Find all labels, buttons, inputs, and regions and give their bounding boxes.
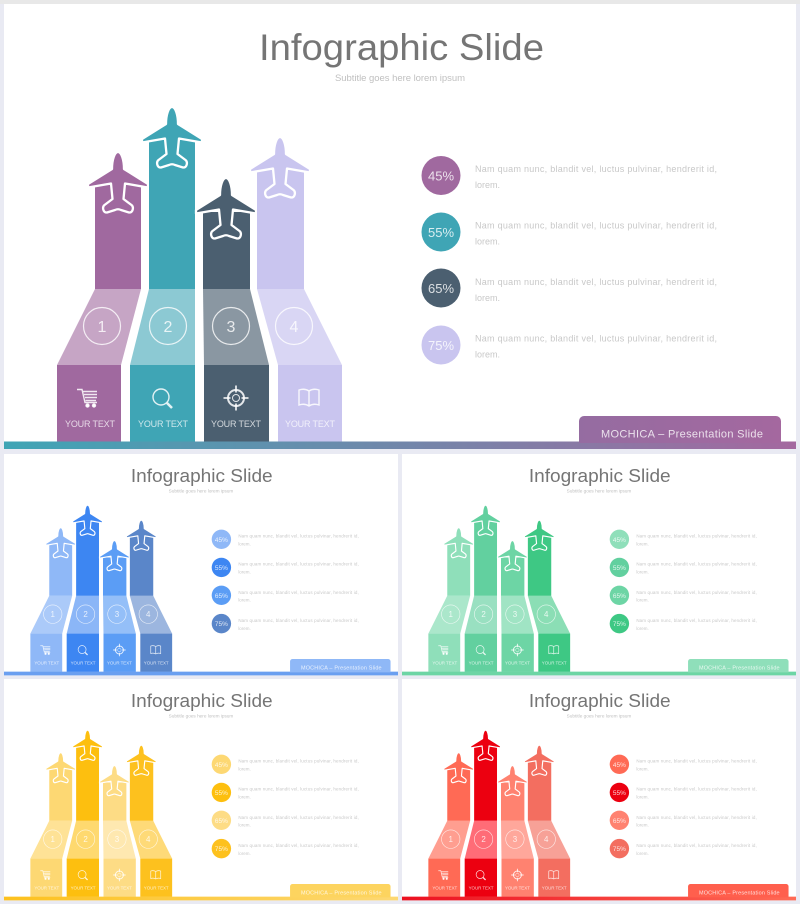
column 2 bbox=[67, 505, 102, 672]
column 4: 4 bbox=[544, 610, 549, 619]
legend row 75% bbox=[212, 614, 359, 633]
icon: cart bbox=[77, 390, 97, 407]
legend row 65% bbox=[212, 811, 359, 830]
legend row 75%: Nam quam nunc, blandit vel, luctus pulvinar, hendrerit id, bbox=[238, 843, 359, 848]
column 3: YOUR TEXT bbox=[107, 885, 132, 890]
icon: plane 4 bbox=[126, 745, 156, 775]
column 3: YOUR TEXT bbox=[107, 660, 132, 665]
icon: magnifier bbox=[78, 871, 88, 880]
column 1: 1 bbox=[51, 835, 56, 844]
column 1: YOUR TEXT bbox=[432, 885, 457, 890]
column 2: YOUR TEXT bbox=[469, 885, 494, 890]
icon: plane 2 bbox=[73, 505, 102, 535]
legend row 45%: 45% bbox=[215, 537, 228, 544]
column 2: 2 bbox=[164, 319, 173, 336]
column 2 bbox=[465, 730, 500, 897]
footer bar bbox=[402, 672, 796, 675]
icon: book bbox=[299, 389, 319, 406]
icon: plane 1 bbox=[444, 528, 474, 558]
legend row 65%: Nam quam nunc, blandit vel, luctus pulvinar, hendrerit id, bbox=[238, 815, 359, 820]
icon: plane 3 bbox=[100, 541, 129, 571]
legend row 75%: 75% bbox=[215, 621, 228, 628]
icon: book bbox=[549, 646, 559, 654]
legend row 55% bbox=[422, 212, 717, 252]
icon: plane 1 bbox=[46, 753, 76, 783]
legend row 45%: Nam quam nunc, blandit vel, luctus pulvinar, hendrerit id, bbox=[475, 164, 717, 174]
legend row 75%: lorem. bbox=[636, 626, 649, 631]
legend row 45%: lorem. bbox=[238, 767, 251, 772]
icon: cart bbox=[40, 871, 50, 879]
legend row 55%: lorem. bbox=[475, 236, 500, 246]
subtitle: Subtitle goes here lorem ipsum bbox=[567, 713, 631, 719]
column 1: YOUR TEXT bbox=[432, 660, 457, 665]
footer bar bbox=[4, 897, 398, 900]
icon: magnifier bbox=[476, 871, 486, 880]
column 2 bbox=[465, 505, 500, 672]
footer tab bbox=[290, 659, 391, 672]
icon: magnifier bbox=[78, 646, 88, 655]
column 4 bbox=[524, 745, 570, 897]
legend row 65%: lorem. bbox=[636, 823, 649, 828]
footer bar bbox=[402, 897, 796, 900]
legend row 75%: Nam quam nunc, blandit vel, luctus pulvinar, hendrerit id, bbox=[636, 618, 757, 623]
icon: plane 1 bbox=[46, 528, 76, 558]
column 4 bbox=[126, 745, 172, 897]
panel: yellow slide bbox=[4, 679, 398, 900]
icon: book bbox=[549, 871, 559, 879]
footer tab: MOCHICA – Presentation Slide bbox=[301, 666, 382, 672]
title: Infographic Slide bbox=[529, 465, 671, 486]
legend row 65%: Nam quam nunc, blandit vel, luctus pulvinar, hendrerit id, bbox=[238, 590, 359, 595]
icon: book bbox=[151, 646, 161, 654]
footer tab: MOCHICA – Presentation Slide bbox=[699, 666, 780, 672]
column 4 bbox=[250, 137, 342, 442]
legend row 65%: lorem. bbox=[238, 598, 251, 603]
title: Infographic Slide bbox=[529, 690, 671, 711]
column 2: 2 bbox=[481, 835, 486, 844]
icon: magnifier bbox=[153, 389, 172, 408]
column 1: 1 bbox=[98, 319, 107, 336]
column 4: YOUR TEXT bbox=[542, 885, 567, 890]
panel: blue slide bbox=[4, 454, 398, 675]
column 3: YOUR TEXT bbox=[505, 885, 530, 890]
legend row 45% bbox=[422, 156, 717, 195]
icon: cart bbox=[438, 646, 448, 654]
icon: plane 4 bbox=[524, 745, 554, 775]
footer tab: MOCHICA – Presentation Slide bbox=[301, 891, 382, 897]
legend row 45%: lorem. bbox=[238, 542, 251, 547]
column 3 bbox=[498, 766, 534, 897]
footer bar bbox=[4, 672, 398, 675]
column 1: YOUR TEXT bbox=[34, 660, 59, 665]
column 2: YOUR TEXT bbox=[469, 660, 494, 665]
legend row 65% bbox=[610, 586, 757, 605]
icon: plane 3 bbox=[100, 766, 129, 796]
legend row 75%: lorem. bbox=[636, 851, 649, 856]
column 2: 2 bbox=[481, 610, 486, 619]
legend row 75% bbox=[610, 614, 757, 633]
legend row 65%: lorem. bbox=[238, 823, 251, 828]
column 4: YOUR TEXT bbox=[285, 419, 336, 429]
legend row 45% bbox=[212, 755, 359, 774]
legend row 65%: Nam quam nunc, blandit vel, luctus pulvinar, hendrerit id, bbox=[636, 590, 757, 595]
icon: cart bbox=[40, 646, 50, 654]
legend row 45%: Nam quam nunc, blandit vel, luctus pulvinar, hendrerit id, bbox=[636, 759, 757, 764]
subtitle: Subtitle goes here lorem ipsum bbox=[335, 73, 465, 84]
column 3: 3 bbox=[227, 319, 236, 336]
legend row 75%: 75% bbox=[215, 846, 228, 853]
column 2 bbox=[130, 107, 202, 442]
legend row 45%: 45% bbox=[428, 168, 454, 184]
legend row 55%: lorem. bbox=[636, 795, 649, 800]
legend row 45% bbox=[610, 755, 757, 774]
icon: target bbox=[113, 869, 126, 881]
column 1: 1 bbox=[449, 835, 454, 844]
legend row 45%: Nam quam nunc, blandit vel, luctus pulvinar, hendrerit id, bbox=[238, 759, 359, 764]
legend row 45%: 45% bbox=[613, 537, 626, 544]
column 1 bbox=[30, 528, 76, 672]
icon: plane 3 bbox=[196, 178, 256, 239]
legend row 65% bbox=[212, 586, 359, 605]
column 4: 4 bbox=[290, 319, 299, 336]
column 1: 1 bbox=[51, 610, 56, 619]
legend row 45%: Nam quam nunc, blandit vel, luctus pulvinar, hendrerit id, bbox=[636, 534, 757, 539]
icon: plane 4 bbox=[524, 520, 554, 550]
icon: plane 1 bbox=[444, 753, 474, 783]
legend row 75% bbox=[610, 839, 757, 858]
column 2: 2 bbox=[83, 610, 88, 619]
legend row 55%: lorem. bbox=[238, 570, 251, 575]
legend row 75%: lorem. bbox=[238, 626, 251, 631]
column 1 bbox=[428, 753, 474, 897]
legend row 45%: lorem. bbox=[636, 767, 649, 772]
legend row 55%: Nam quam nunc, blandit vel, luctus pulvinar, hendrerit id, bbox=[636, 787, 757, 792]
column 2: YOUR TEXT bbox=[71, 885, 96, 890]
legend row 65%: 65% bbox=[613, 593, 626, 600]
legend row 65%: 65% bbox=[613, 818, 626, 825]
column 3 bbox=[498, 541, 534, 672]
panel: red slide bbox=[402, 679, 796, 900]
legend row 55%: 55% bbox=[613, 565, 626, 572]
legend row 75%: Nam quam nunc, blandit vel, luctus pulvinar, hendrerit id, bbox=[238, 618, 359, 623]
column 4 bbox=[126, 520, 172, 672]
column 4: YOUR TEXT bbox=[144, 885, 169, 890]
footer bar bbox=[4, 442, 796, 449]
legend row 45%: 45% bbox=[613, 762, 626, 769]
legend row 55%: lorem. bbox=[636, 570, 649, 575]
legend row 55%: Nam quam nunc, blandit vel, luctus pulvinar, hendrerit id, bbox=[238, 787, 359, 792]
legend row 65%: Nam quam nunc, blandit vel, luctus pulvinar, hendrerit id, bbox=[475, 277, 717, 287]
legend row 75%: Nam quam nunc, blandit vel, luctus pulvinar, hendrerit id, bbox=[475, 334, 717, 344]
legend row 55% bbox=[212, 558, 359, 577]
legend row 65% bbox=[610, 811, 757, 830]
legend row 55%: 55% bbox=[613, 790, 626, 797]
column 4: 4 bbox=[146, 610, 151, 619]
legend row 75% bbox=[422, 326, 717, 364]
column 1 bbox=[57, 152, 148, 442]
column 1 bbox=[428, 528, 474, 672]
legend row 55%: lorem. bbox=[238, 795, 251, 800]
footer tab bbox=[688, 659, 789, 672]
legend row 55% bbox=[212, 783, 359, 802]
icon: plane 3 bbox=[498, 766, 527, 796]
legend row 45%: lorem. bbox=[636, 542, 649, 547]
column 1: YOUR TEXT bbox=[34, 885, 59, 890]
column 3: 3 bbox=[513, 610, 518, 619]
legend row 65%: 65% bbox=[215, 818, 228, 825]
legend row 65%: Nam quam nunc, blandit vel, luctus pulvinar, hendrerit id, bbox=[636, 815, 757, 820]
column 4: YOUR TEXT bbox=[144, 660, 169, 665]
subtitle: Subtitle goes here lorem ipsum bbox=[169, 713, 233, 719]
legend row 65%: 65% bbox=[428, 281, 454, 296]
column 3: YOUR TEXT bbox=[211, 419, 262, 429]
column 1 bbox=[30, 753, 76, 897]
legend row 55%: Nam quam nunc, blandit vel, luctus pulvinar, hendrerit id, bbox=[475, 220, 717, 230]
subtitle: Subtitle goes here lorem ipsum bbox=[169, 488, 233, 494]
footer tab: MOCHICA – Presentation Slide bbox=[699, 891, 780, 897]
column 3: 3 bbox=[115, 835, 120, 844]
icon: plane 2 bbox=[471, 505, 500, 535]
legend row 55%: 55% bbox=[215, 565, 228, 572]
column 3: YOUR TEXT bbox=[505, 660, 530, 665]
legend row 65%: 65% bbox=[215, 593, 228, 600]
title: Infographic Slide bbox=[131, 465, 273, 486]
legend row 45%: Nam quam nunc, blandit vel, luctus pulvinar, hendrerit id, bbox=[238, 534, 359, 539]
icon: plane 2 bbox=[73, 730, 102, 760]
footer tab bbox=[688, 884, 789, 897]
column 2 bbox=[67, 730, 102, 897]
icon: plane 4 bbox=[126, 520, 156, 550]
column 4 bbox=[524, 520, 570, 672]
legend row 55%: Nam quam nunc, blandit vel, luctus pulvinar, hendrerit id, bbox=[636, 562, 757, 567]
column 1: 1 bbox=[449, 610, 454, 619]
icon: plane 2 bbox=[471, 730, 500, 760]
column 2: 2 bbox=[83, 835, 88, 844]
icon: target bbox=[511, 869, 524, 881]
icon: target bbox=[224, 386, 248, 410]
legend row 55%: 55% bbox=[428, 225, 454, 240]
column 3: 3 bbox=[115, 610, 120, 619]
legend row 45%: lorem. bbox=[475, 180, 500, 190]
legend row 65% bbox=[422, 268, 717, 308]
panel: green slide bbox=[402, 454, 796, 675]
panel: main slide bbox=[4, 4, 796, 449]
icon: cart bbox=[438, 871, 448, 879]
title: Infographic Slide bbox=[259, 26, 544, 68]
legend row 55%: Nam quam nunc, blandit vel, luctus pulvinar, hendrerit id, bbox=[238, 562, 359, 567]
column 3: 3 bbox=[513, 835, 518, 844]
icon: plane 4 bbox=[250, 137, 310, 198]
column 3 bbox=[100, 541, 136, 672]
column 2: YOUR TEXT bbox=[71, 660, 96, 665]
legend row 55% bbox=[610, 558, 757, 577]
legend row 75%: 75% bbox=[428, 338, 454, 353]
legend row 75%: lorem. bbox=[475, 350, 500, 360]
legend row 75%: 75% bbox=[613, 846, 626, 853]
title: Infographic Slide bbox=[131, 690, 273, 711]
column 1: YOUR TEXT bbox=[65, 419, 116, 429]
legend row 45% bbox=[610, 530, 757, 549]
column 4: YOUR TEXT bbox=[542, 660, 567, 665]
legend row 65%: lorem. bbox=[636, 598, 649, 603]
column 4: 4 bbox=[544, 835, 549, 844]
subtitle: Subtitle goes here lorem ipsum bbox=[567, 488, 631, 494]
legend row 75%: Nam quam nunc, blandit vel, luctus pulvinar, hendrerit id, bbox=[636, 843, 757, 848]
legend row 75%: lorem. bbox=[238, 851, 251, 856]
column 4: 4 bbox=[146, 835, 151, 844]
icon: plane 1 bbox=[88, 152, 148, 213]
icon: magnifier bbox=[476, 646, 486, 655]
legend row 75%: 75% bbox=[613, 621, 626, 628]
footer tab: MOCHICA – Presentation Slide bbox=[601, 428, 763, 440]
legend row 55% bbox=[610, 783, 757, 802]
legend row 55%: 55% bbox=[215, 790, 228, 797]
icon: target bbox=[113, 644, 126, 656]
icon: plane 2 bbox=[142, 107, 202, 168]
footer tab bbox=[579, 416, 781, 443]
icon: book bbox=[151, 871, 161, 879]
column 2: YOUR TEXT bbox=[138, 419, 188, 429]
legend row 45%: 45% bbox=[215, 762, 228, 769]
icon: target bbox=[511, 644, 524, 656]
column 3 bbox=[100, 766, 136, 897]
legend row 75% bbox=[212, 839, 359, 858]
footer tab bbox=[290, 884, 391, 897]
legend row 45% bbox=[212, 530, 359, 549]
icon: plane 3 bbox=[498, 541, 527, 571]
legend row 65%: lorem. bbox=[475, 293, 500, 303]
column 3 bbox=[196, 178, 269, 442]
